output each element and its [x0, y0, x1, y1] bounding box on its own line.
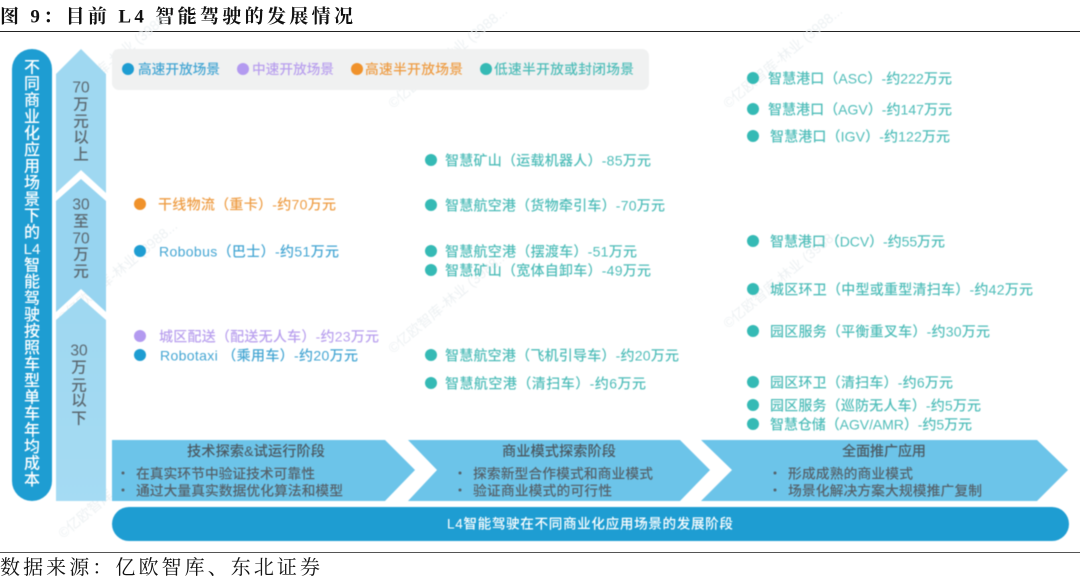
panel: stage 3 scenarios	[747, 71, 1033, 433]
arrow: 70万元以上: 以	[73, 130, 89, 146]
chart: L4 development stages: ©亿欧智库-林业 (3988...	[720, 222, 845, 331]
legend: 高速开放场景	[138, 62, 220, 77]
title: 图 9：目前 L4 智能驾驶的发展情况	[0, 6, 353, 28]
panel: vertical axis title pill: L4	[24, 241, 40, 258]
legend: 低速半开放或封闭场景	[494, 62, 634, 77]
stage chevron: business model exploration: 商业模式探索阶段	[502, 443, 616, 460]
arrow: 70万元以上: 元	[73, 114, 89, 130]
chart: L4 development stages: ©亿欧智库-林业 (3988...	[55, 217, 180, 326]
panel: stage 3 scenarios: 园区服务（平衡重叉车）-约30万元	[770, 324, 990, 340]
panel: vertical axis title pill	[12, 49, 52, 501]
arrow: 70万元以上: 70	[72, 80, 90, 96]
panel: stage 3 scenarios: 智慧港口（DCV）-约55万元	[770, 234, 945, 250]
source note: 数据来源：亿欧智库、东北证券	[0, 556, 320, 579]
stage chevron: technology exploration: 技术探索&试运行阶段	[187, 443, 325, 460]
panel: stage 1 scenarios: 干线物流（重卡）-约70万元	[158, 197, 336, 213]
horizontal axis title pill	[112, 507, 1069, 541]
arrow: 30至70万元: 万	[73, 246, 89, 264]
arrow: 30至70万元: 元	[73, 264, 89, 280]
panel: vertical axis title pill: 驾	[24, 290, 40, 308]
arrow: 30万元以下	[56, 298, 106, 501]
panel: stage 3 scenarios: 园区环卫（清扫车）-约6万元	[770, 375, 953, 391]
panel: stage 3 scenarios: 城区环卫（中型或重型清扫车）-约42万元	[770, 282, 1033, 298]
stage chevron: full rollout: 全面推广应用	[842, 443, 926, 460]
panel: vertical axis title pill: 同	[24, 76, 40, 93]
panel: vertical axis title pill: 业	[24, 108, 40, 126]
panel: vertical axis title pill: 商	[24, 92, 40, 110]
legend: 中速开放场景	[252, 62, 334, 77]
panel: stage 1 scenarios: 城区配送（配送无人车）-约23万元	[159, 329, 379, 345]
panel: stage 2 scenarios: 智慧航空港（摆渡车）-51万元	[445, 244, 637, 260]
chart: L4 development stages: ©亿欧智库-林业 (3988...	[385, 2, 510, 111]
panel: vertical axis title pill: 场	[24, 174, 40, 192]
panel: vertical axis title pill: 照	[24, 339, 40, 357]
arrow: 70万元以上: 上	[73, 146, 89, 164]
legend	[112, 49, 649, 90]
panel: vertical axis title pill: 驶	[24, 306, 40, 324]
panel: vertical axis title pill: 年	[24, 422, 40, 440]
stage chevron: business model exploration: 探索新型合作模式和商业模式	[473, 466, 653, 482]
panel: stage 2 scenarios: 智慧矿山（运载机器人）-85万元	[445, 153, 651, 169]
arrow: 30至70万元	[56, 179, 106, 312]
chart: L4 development stages: ©亿欧智库-林业 (3988...	[720, 2, 845, 111]
panel: vertical axis title pill: 用	[24, 158, 40, 176]
arrow: 30至70万元: 至	[73, 214, 89, 230]
panel: vertical axis title pill: 化	[24, 124, 40, 142]
chart: L4 development stages: ©亿欧智库-林业 (3988...	[55, 432, 180, 541]
panel: vertical axis title pill: 按	[24, 322, 40, 340]
stage chevron: business model exploration: 验证商业模式的可行性	[473, 482, 612, 498]
panel: vertical axis title pill: 能	[24, 273, 40, 291]
panel: vertical axis title pill: 成	[24, 454, 40, 472]
panel: vertical axis title pill: 的	[24, 224, 40, 242]
stage chevron: full rollout	[701, 440, 1068, 501]
panel: stage 2 scenarios: 智慧航空港（清扫车）-约6万元	[445, 376, 646, 392]
arrow: 30万元以下: 万	[71, 360, 87, 376]
stage chevron: full rollout: 场景化解决方案大规模推广复制	[788, 482, 982, 498]
stage chevron: technology exploration	[112, 440, 415, 501]
arrow: 30万元以下: 以	[71, 392, 87, 410]
panel: stage 3 scenarios: 智慧仓储（AGV/AMR）-约5万元	[770, 417, 972, 433]
panel: stage 1 scenarios: Robobus（巴士）-约51万元	[159, 244, 339, 260]
panel: vertical axis title pill: 车	[24, 405, 40, 423]
stage chevron: technology exploration: 通过大量真实数据优化算法和模型	[136, 482, 343, 498]
arrow: 70万元以上: 万	[73, 96, 89, 114]
panel: vertical axis title pill: 本	[24, 471, 40, 489]
panel: vertical axis title pill: 型	[24, 372, 40, 390]
panel: vertical axis title pill: 景	[24, 192, 40, 208]
arrow: 30万元以下: 下	[71, 410, 87, 428]
arrow: 30至70万元: 70	[72, 230, 90, 248]
legend: 高速半开放场景	[365, 62, 463, 77]
chart: L4 development stages: ©亿欧智库-林业 (3988...	[52, 4, 177, 113]
panel: stage 1 scenarios	[134, 197, 379, 364]
chart: L4 development stages: ©亿欧智库-林业 (3988...	[385, 247, 510, 356]
stage chevron: full rollout: 形成成熟的商业模式	[788, 466, 913, 482]
panel: stage 3 scenarios: 园区服务（巡防无人车）-约5万元	[770, 398, 981, 414]
panel: stage 3 scenarios: 智慧港口（ASC）-约222万元	[768, 71, 952, 87]
arrow: 30至70万元: 30	[72, 196, 90, 214]
panel: vertical axis title pill: 下	[24, 208, 40, 225]
panel: vertical axis title pill: 均	[24, 438, 40, 456]
panel: stage 2 scenarios: 智慧矿山（宽体自卸车）-49万元	[445, 263, 651, 279]
stage chevron: technology exploration: 在真实环节中验证技术可靠性	[136, 466, 315, 482]
panel: stage 1 scenarios: Robotaxi （乘用车）-约20万元	[160, 348, 358, 364]
arrow: 30万元以下: 元	[71, 378, 87, 394]
panel: vertical axis title pill: 车	[24, 356, 40, 374]
panel: stage 2 scenarios	[425, 153, 679, 392]
stage chevron: business model exploration	[408, 440, 710, 501]
panel: vertical axis title pill: 单	[24, 388, 40, 406]
panel: stage 3 scenarios: 智慧港口（IGV）-约122万元	[770, 129, 950, 145]
panel: vertical axis title pill: 不	[24, 60, 40, 76]
arrow: 70万元以上	[56, 49, 106, 193]
panel: vertical axis title pill: 应	[24, 140, 40, 159]
panel: stage 2 scenarios: 智慧航空港（飞机引导车）-约20万元	[445, 348, 679, 364]
panel: vertical axis title pill: 智	[24, 256, 40, 274]
panel: stage 3 scenarios: 智慧港口（AGV）-约147万元	[768, 102, 952, 118]
horizontal axis title pill: L4智能驾驶在不同商业化应用场景的发展阶段	[447, 516, 733, 532]
arrow: 30万元以下: 30	[70, 342, 88, 360]
panel: stage 2 scenarios: 智慧航空港（货物牵引车）-70万元	[445, 198, 665, 214]
